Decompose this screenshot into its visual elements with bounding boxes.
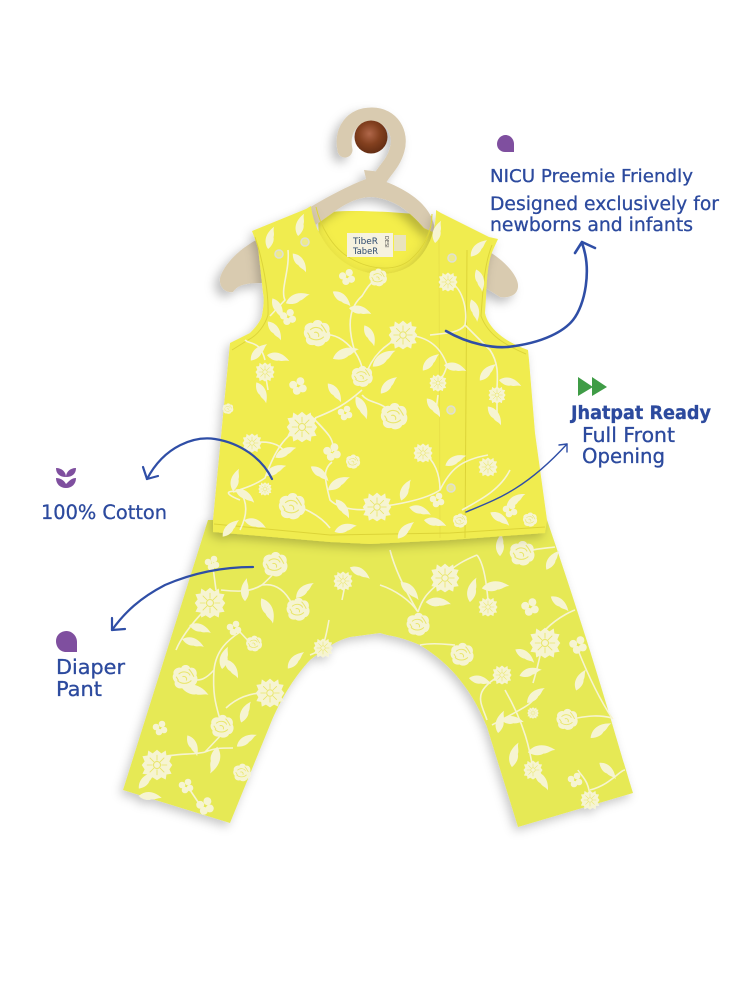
sleeveless top <box>213 206 547 544</box>
top floral stems <box>228 250 510 530</box>
pants <box>123 520 633 827</box>
hanger <box>220 115 518 297</box>
callout: Jhatpat Ready <box>569 377 712 468</box>
pants body <box>123 520 633 827</box>
top floral motifs <box>219 212 537 540</box>
placket and seams <box>214 207 545 538</box>
hanger arms <box>309 170 435 233</box>
icon: fast-forward <box>578 377 607 396</box>
NICU description: newborns and infants <box>490 215 693 236</box>
callout: NICU Preemie Friendly <box>490 135 719 236</box>
NICU description: Designed exclusively for <box>490 194 719 215</box>
top body <box>213 206 547 544</box>
neck label: DESI <box>383 236 389 248</box>
NICU heading: NICU Preemie Friendly <box>490 167 693 187</box>
brand tag <box>347 233 393 257</box>
icon: leaf <box>56 468 76 488</box>
back of neck fabric <box>318 211 436 280</box>
size tag <box>394 235 406 251</box>
Jhatpat heading: Jhatpat Ready <box>569 402 712 424</box>
pants floral stems <box>157 547 625 805</box>
neck label: TibeR <box>352 237 378 247</box>
Jhatpat description: Opening <box>582 444 665 468</box>
hanger hook <box>344 115 398 184</box>
diaper label: Diaper <box>56 655 126 679</box>
neck label: TabeR <box>352 247 378 257</box>
diaper label <box>56 655 126 701</box>
arrow: cotton <box>143 438 272 479</box>
callout: 100% Cotton <box>41 468 167 524</box>
hanger wooden knob <box>354 120 388 154</box>
cotton label: 100% Cotton <box>41 501 167 524</box>
snap buttons <box>275 238 456 492</box>
arrow: jhatpat <box>466 444 567 512</box>
Jhatpat description <box>582 423 675 468</box>
callout: Diaper Pant <box>56 631 126 701</box>
NICU description <box>490 194 719 236</box>
neck label <box>347 233 406 257</box>
pants floral motifs <box>135 532 619 815</box>
arrow: diaper <box>112 567 253 630</box>
arrow: NICU <box>446 242 595 347</box>
Jhatpat description: Full Front <box>582 423 675 447</box>
icon: drop <box>497 135 514 152</box>
icon: drop <box>56 631 77 652</box>
diaper label: Pant <box>56 677 102 701</box>
